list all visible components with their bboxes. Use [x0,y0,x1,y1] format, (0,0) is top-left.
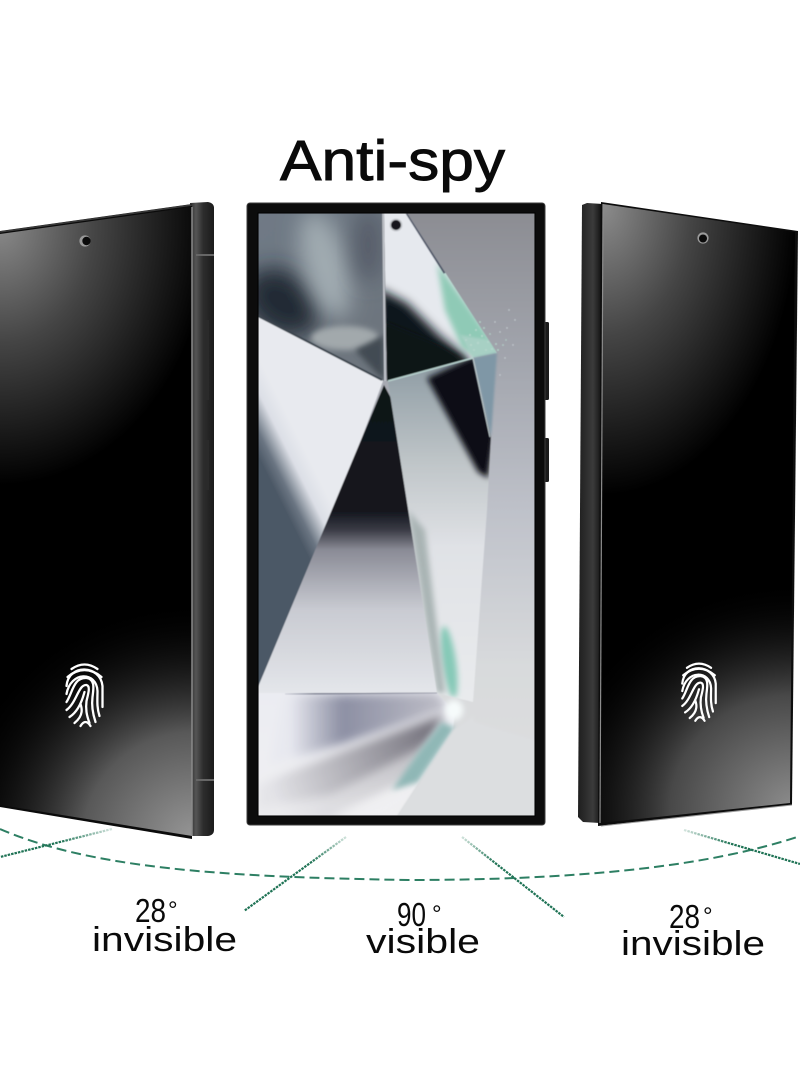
top crystal facet [384,214,497,382]
label: 28 degrees invisible right: ° [703,903,713,930]
viewing angle lines [0,829,800,917]
label: 28 degrees invisible right [621,898,765,963]
center phone [232,203,549,825]
viewing angle arc [0,829,800,880]
bottom facets [258,693,535,816]
label: 28 degrees invisible left [92,892,237,959]
label: 90 degrees visible [366,896,480,961]
left white facet [258,316,383,687]
title: Anti-spy [280,129,506,193]
right phone [578,200,798,830]
left phone camera [79,235,91,247]
upper left facet [258,214,384,381]
label: 90 degrees visible: ° [432,901,442,928]
center phone frame [247,203,545,825]
left phone [0,200,214,840]
center phone buttons [544,322,549,482]
left phone side frame [190,202,214,836]
right phone camera [697,232,709,244]
icon: fingerprint left [66,664,102,726]
center phone bezel edge [258,213,535,816]
particle spray [465,309,516,376]
right phone side frame [578,203,603,823]
icon: fingerprint right [682,664,716,721]
crystal divider [383,213,385,381]
label: 90 degrees visible: visible [366,923,480,961]
label: 28 degrees invisible right: invisible [621,925,765,963]
lower crystal facet [388,353,497,702]
label: 28 degrees invisible right: 28 [669,898,700,935]
middle facet [258,385,437,693]
label: 28 degrees invisible left: invisible [92,921,237,959]
camera hole [390,218,402,232]
left phone screen [0,200,195,840]
label: 28 degrees invisible left: 28 [135,892,166,929]
label: 28 degrees invisible left: ° [168,897,178,924]
label: 90 degrees visible: 90 [397,896,426,933]
right phone screen [598,200,798,830]
center phone wallpaper [258,214,534,816]
